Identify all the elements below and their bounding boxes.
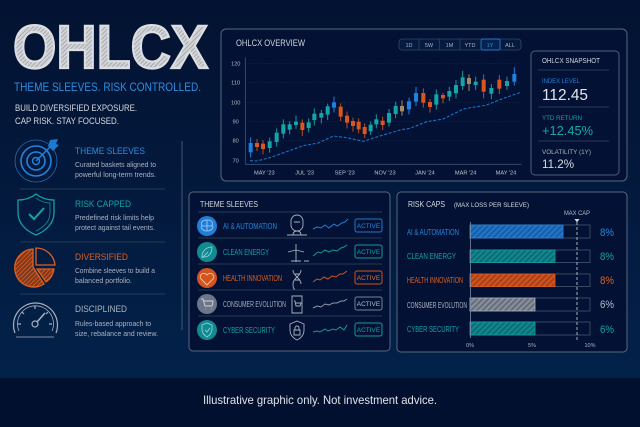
- snapshot heading: OHLCX SNAPSHOT: [542, 56, 600, 65]
- row: consumer evolution: ACTIVE: [357, 301, 381, 308]
- x axis labels: NOV '23: [374, 171, 396, 177]
- feature: diversified: [15, 248, 156, 287]
- title: OHLCX: [13, 13, 208, 81]
- description: disciplined: size, rebalance and review.: [75, 329, 158, 338]
- bar tracks: [470, 225, 590, 335]
- bar: clean energy: 8%: [600, 251, 614, 263]
- x axis labels: JUL '23: [295, 171, 314, 177]
- description: diversified: balanced portfolio.: [75, 276, 132, 285]
- candlestick chart: [231, 57, 522, 177]
- description: diversified: Combine sleeves to build a: [75, 266, 156, 275]
- time range buttons: 1D: [405, 43, 413, 49]
- panel: theme sleeves: [189, 192, 390, 351]
- tagline: THEME SLEEVES. RISK CONTROLLED.: [14, 80, 201, 94]
- x axis labels: SEP '23: [335, 171, 355, 177]
- bar: consumer evolution: CONSUMER EVOLUTION: [407, 301, 467, 310]
- tan candles: [400, 74, 471, 116]
- time range buttons: 1Y: [487, 43, 494, 49]
- icon: gauge: [13, 303, 58, 337]
- time range buttons: [399, 39, 521, 50]
- icon: target: [15, 139, 59, 182]
- row: clean energy: CLEAN ENERGY: [223, 248, 269, 257]
- bar: cyber security: CYBER SECURITY: [407, 325, 459, 334]
- description: disciplined: Rules-based approach to: [75, 319, 151, 328]
- bar: health innovation: HEALTH INNOVATION: [407, 276, 463, 285]
- y axis labels: 70: [233, 158, 239, 164]
- bar: health innovation: 8%: [600, 275, 614, 287]
- row: health innovation: HEALTH INNOVATION: [223, 274, 282, 283]
- description: theme sleeves: [75, 160, 156, 179]
- time range buttons: 5W: [425, 43, 434, 49]
- description: diversified: [75, 266, 156, 285]
- feature: disciplined: [13, 303, 158, 338]
- y axis labels: 120: [231, 61, 240, 67]
- blue candles: [249, 67, 516, 157]
- bar: consumer evolution: [407, 298, 614, 311]
- bar: cyber security: [407, 322, 614, 336]
- x axis labels: MAY '24: [496, 171, 516, 177]
- time range buttons: YTD: [464, 43, 476, 49]
- ytd return: +12.45%: [542, 123, 593, 138]
- bar: ai and automation: [407, 225, 614, 239]
- x axis labels: 10%: [584, 343, 596, 349]
- row: consumer evolution: CONSUMER EVOLUTION: [223, 300, 286, 309]
- row: health innovation: ACTIVE: [357, 275, 381, 282]
- index level: INDEX LEVEL: [542, 78, 580, 85]
- feature: theme sleeves: [15, 139, 156, 182]
- panel: risk caps: [397, 192, 627, 352]
- y axis labels: 100: [231, 100, 240, 106]
- intro text: CAP RISK. STAY FOCUSED.: [15, 116, 119, 126]
- description: disciplined: [75, 319, 158, 338]
- y axis labels: 110: [231, 81, 240, 87]
- bar: ai and automation: AI & AUTOMATION: [407, 228, 459, 237]
- description: theme sleeves: Curated baskets aligned to: [75, 160, 156, 169]
- theme sleeves heading: THEME SLEEVES: [200, 199, 258, 209]
- row: cyber security: [197, 320, 382, 340]
- index level: [542, 78, 588, 104]
- y axis labels: 90: [233, 120, 239, 126]
- x axis labels: 5%: [528, 343, 536, 349]
- x axis labels: [466, 343, 596, 349]
- y axis labels: [231, 61, 240, 164]
- ytd return: YTD RETURN: [542, 115, 582, 122]
- row: consumer evolution: [197, 294, 382, 314]
- risk caps heading: [408, 199, 529, 209]
- icon: shield: [18, 194, 54, 235]
- description: risk capped: protect against tail events.: [75, 223, 155, 232]
- heading: theme sleeves: THEME SLEEVES: [75, 146, 145, 157]
- x axis labels: [254, 171, 516, 177]
- x axis labels: MAR '24: [455, 171, 476, 177]
- row: cyber security: CYBER SECURITY: [223, 326, 275, 335]
- icon: pie chart: [15, 248, 55, 287]
- ytd return: [542, 115, 593, 138]
- bar: cyber security: 6%: [600, 324, 614, 336]
- teal candles: [268, 71, 509, 153]
- description: theme sleeves: powerful long-term trends.: [75, 170, 156, 179]
- orange candles: [255, 74, 501, 154]
- panel: overview: [221, 29, 627, 181]
- risk caps heading: RISK CAPS: [408, 199, 445, 209]
- description: risk capped: Predefined risk limits help: [75, 213, 154, 222]
- bar: clean energy: [407, 250, 614, 263]
- volatility: VOLATILITY (1Y): [542, 149, 591, 156]
- row: clean energy: [197, 242, 382, 262]
- x axis labels: JAN '24: [415, 171, 435, 177]
- y axis labels: 80: [233, 139, 239, 145]
- time range buttons: 1M: [446, 43, 454, 49]
- x axis labels: 0%: [466, 343, 474, 349]
- footer disclaimer: Illustrative graphic only. Not investment advice.: [203, 393, 437, 407]
- volatility: [542, 149, 591, 171]
- max cap marker: MAX CAP: [564, 211, 590, 217]
- heading: diversified: DIVERSIFIED: [75, 252, 128, 263]
- time range buttons: ALL: [505, 43, 515, 49]
- risk caps heading: (MAX LOSS PER SLEEVE): [454, 203, 529, 209]
- row: ai and automation: [197, 215, 382, 236]
- volatility: 11.2%: [542, 157, 574, 171]
- panel: snapshot: [531, 51, 619, 175]
- heading: risk capped: RISK CAPPED: [75, 199, 131, 210]
- bar: ai and automation: 8%: [600, 227, 614, 239]
- footer band: [0, 378, 640, 427]
- row: clean energy: ACTIVE: [357, 249, 381, 256]
- feature: risk capped: [18, 194, 155, 235]
- overview heading: OHLCX OVERVIEW: [236, 38, 305, 48]
- row: health innovation: [197, 268, 382, 289]
- intro text: BUILD DIVERSIFIED EXPOSURE.: [15, 103, 137, 113]
- bar: health innovation: [407, 274, 614, 287]
- x axis labels: MAY '23: [254, 171, 275, 177]
- row: cyber security: ACTIVE: [357, 327, 381, 334]
- index level: 112.45: [542, 87, 588, 104]
- bar: clean energy: CLEAN ENERGY: [407, 252, 457, 261]
- description: risk capped: [75, 213, 155, 232]
- trend line: [250, 93, 520, 161]
- max cap marker: [564, 211, 590, 340]
- row: ai and automation: ACTIVE: [357, 223, 381, 230]
- row: ai and automation: AI & AUTOMATION: [223, 222, 277, 231]
- bar: consumer evolution: 6%: [600, 299, 614, 311]
- intro text: [15, 103, 137, 126]
- heading: disciplined: DISCIPLINED: [75, 304, 127, 315]
